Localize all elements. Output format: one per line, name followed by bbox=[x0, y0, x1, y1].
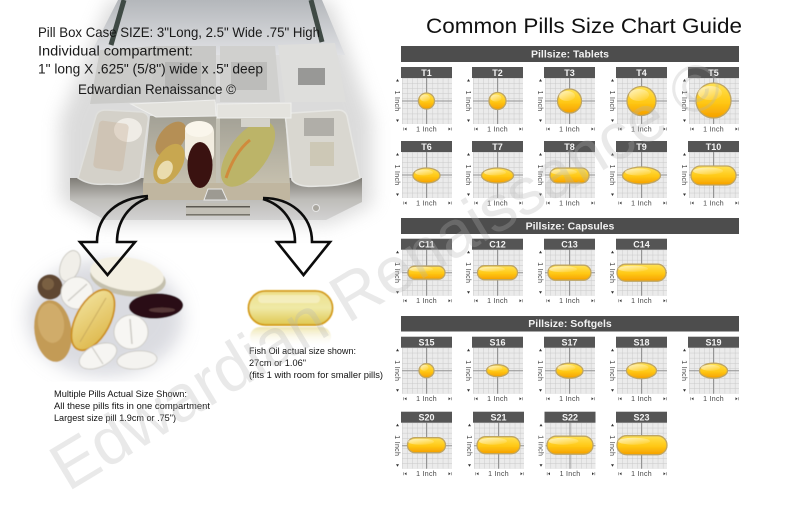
chart: S17 bbox=[536, 337, 595, 403]
chart: T9: 1 Inch bbox=[631, 200, 652, 208]
chart: T10: 1 Inch bbox=[703, 200, 724, 208]
caption: multiple pills bbox=[54, 389, 210, 424]
chart: C13 bbox=[536, 239, 595, 305]
chart: T1: 1 Inch bbox=[416, 126, 437, 134]
chart: S20: 1 Inch bbox=[393, 435, 400, 456]
panel heading: capsules bbox=[401, 218, 739, 234]
chart: T4 bbox=[608, 67, 667, 134]
chart: S17: 1 Inch bbox=[559, 396, 580, 403]
panel heading: capsules: Pillsize: Capsules bbox=[526, 220, 615, 232]
chart: T8: 1 Inch bbox=[559, 200, 580, 208]
chart: T6: T6 bbox=[421, 142, 432, 152]
chart: S22: 1 Inch bbox=[536, 435, 544, 456]
chart: T5 bbox=[680, 67, 739, 134]
chart: T3: 1 Inch bbox=[536, 91, 543, 111]
chart: S19: 1 Inch bbox=[703, 396, 724, 403]
chart: S15: 1 Inch bbox=[416, 396, 437, 403]
chart: T9 bbox=[608, 141, 667, 208]
caption: fish oil: Fish Oil actual size shown: bbox=[249, 346, 356, 357]
chart: T4: T4 bbox=[636, 68, 647, 78]
arrow: left, to multiple pills bbox=[80, 196, 148, 275]
photo: fish oil softgel with reflection bbox=[248, 291, 332, 347]
chart: S18 bbox=[608, 337, 667, 403]
chart: C14: 1 Inch bbox=[631, 298, 652, 305]
chart: S23: 1 Inch bbox=[631, 471, 652, 478]
chart: T6 bbox=[393, 141, 452, 208]
chart: S17: 1 Inch bbox=[536, 360, 543, 381]
chart: T8 bbox=[536, 141, 595, 208]
chart: T7 bbox=[464, 141, 523, 208]
chart: S15 bbox=[393, 337, 452, 403]
title: Common Pills Size Chart Guide bbox=[426, 15, 742, 38]
chart: S15: 1 Inch bbox=[393, 360, 400, 381]
text block: pill box dimensions: Pill Box Case SIZE: 3"Long, 2.5" Wide .75" High bbox=[38, 24, 320, 40]
chart: C13: 1 Inch bbox=[536, 262, 543, 283]
chart: T7: T7 bbox=[492, 142, 503, 152]
chart: C14: 1 Inch bbox=[608, 262, 615, 283]
chart: S22 bbox=[536, 412, 596, 478]
panel heading: softgels bbox=[401, 316, 739, 332]
chart: C12 bbox=[464, 239, 523, 305]
chart: S23 bbox=[608, 412, 667, 478]
chart: T8: T8 bbox=[564, 142, 575, 152]
chart: T1: 1 Inch bbox=[393, 91, 400, 111]
chart: S23: S23 bbox=[633, 413, 650, 423]
chart: T1 bbox=[393, 67, 452, 134]
chart: S22: 1 Inch bbox=[560, 471, 580, 478]
chart: C13: 1 Inch bbox=[559, 298, 580, 305]
chart: T5: 1 Inch bbox=[703, 126, 724, 134]
chart: C11: C11 bbox=[418, 240, 435, 250]
chart: T2 bbox=[464, 67, 523, 134]
chart: S16: 1 Inch bbox=[487, 396, 508, 403]
panel heading: tablets: Pillsize: Tablets bbox=[531, 48, 609, 60]
chart: S16: S16 bbox=[489, 338, 506, 348]
chart: T2: 1 Inch bbox=[487, 126, 508, 134]
chart: S19 bbox=[680, 337, 739, 403]
chart: T9: 1 Inch bbox=[608, 165, 615, 185]
panel heading: tablets bbox=[401, 46, 739, 62]
chart: S20: S20 bbox=[418, 413, 435, 423]
chart: T8: 1 Inch bbox=[536, 165, 543, 185]
caption: multiple pills: All these pills fits in one compartment bbox=[54, 401, 210, 412]
chart: T9: T9 bbox=[636, 142, 647, 152]
text block: pill box dimensions: 1" long X .625" (5/8") wide x .5" deep bbox=[38, 60, 263, 76]
text block: pill box dimensions bbox=[38, 24, 320, 97]
chart: C14: C14 bbox=[633, 240, 650, 250]
chart: S22: S22 bbox=[562, 413, 578, 423]
caption: multiple pills: Multiple Pills Actual Size Shown: bbox=[54, 389, 187, 400]
caption: fish oil: 27cm or 1.06" bbox=[249, 358, 306, 369]
text block: pill box dimensions: Individual compartment: bbox=[38, 42, 193, 58]
chart: S18: 1 Inch bbox=[608, 360, 615, 381]
chart: C11: 1 Inch bbox=[393, 262, 400, 283]
chart: T10 bbox=[680, 141, 739, 208]
chart: S21 bbox=[465, 412, 524, 478]
photo: open pill box case bbox=[60, 0, 372, 224]
chart: S21: 1 Inch bbox=[488, 471, 509, 478]
chart: T3 bbox=[536, 67, 595, 134]
panel: pill size chart bbox=[393, 46, 739, 478]
chart: S16: 1 Inch bbox=[464, 360, 471, 381]
chart: T6: 1 Inch bbox=[393, 165, 400, 185]
chart: S20 bbox=[393, 412, 452, 478]
chart: S19: S19 bbox=[705, 338, 722, 348]
chart: T7: 1 Inch bbox=[487, 200, 508, 208]
chart: C12: 1 Inch bbox=[464, 262, 471, 283]
chart: S21: 1 Inch bbox=[465, 435, 472, 456]
chart: T4: 1 Inch bbox=[631, 126, 652, 134]
chart: T3: T3 bbox=[564, 68, 575, 78]
caption: multiple pills: Largest size pill 1.9cm or .75") bbox=[54, 413, 176, 424]
chart: S21: S21 bbox=[490, 413, 507, 423]
chart: S15: S15 bbox=[418, 338, 435, 348]
caption: fish oil bbox=[249, 346, 383, 381]
chart: T7: 1 Inch bbox=[464, 165, 471, 185]
chart: S18: 1 Inch bbox=[631, 396, 652, 403]
chart: S16 bbox=[464, 337, 523, 403]
chart: S19: 1 Inch bbox=[680, 360, 687, 381]
chart: C12: 1 Inch bbox=[487, 298, 508, 305]
chart: S18: S18 bbox=[633, 338, 650, 348]
photo: multiple assorted pills bbox=[27, 248, 183, 376]
chart: S17: S17 bbox=[561, 338, 578, 348]
chart: S20: 1 Inch bbox=[416, 471, 437, 478]
chart: C13: C13 bbox=[561, 240, 578, 250]
chart: T3: 1 Inch bbox=[559, 126, 580, 134]
chart: T6: 1 Inch bbox=[416, 200, 437, 208]
chart: T4: 1 Inch bbox=[608, 91, 615, 111]
chart: C11 bbox=[393, 239, 452, 305]
chart: T5: T5 bbox=[708, 68, 719, 78]
chart: T10: 1 Inch bbox=[680, 165, 687, 185]
chart: T1: T1 bbox=[421, 68, 432, 78]
text block: pill box dimensions: Edwardian Renaissance © bbox=[78, 81, 237, 97]
chart: T2: 1 Inch bbox=[464, 91, 471, 111]
arrow: right, to fish oil bbox=[263, 198, 330, 275]
caption: fish oil: (fits 1 with room for smaller pills) bbox=[249, 370, 383, 381]
chart: C14 bbox=[608, 239, 667, 305]
chart: T10: T10 bbox=[706, 142, 721, 152]
panel heading: softgels: Pillsize: Softgels bbox=[528, 318, 612, 330]
chart: T5: 1 Inch bbox=[680, 91, 687, 111]
chart: C12: C12 bbox=[489, 240, 506, 250]
chart: S23: 1 Inch bbox=[608, 435, 615, 456]
chart: T2: T2 bbox=[492, 68, 503, 78]
chart: C11: 1 Inch bbox=[416, 298, 437, 305]
watermark: Edwardian Renaissance © bbox=[37, 44, 735, 504]
